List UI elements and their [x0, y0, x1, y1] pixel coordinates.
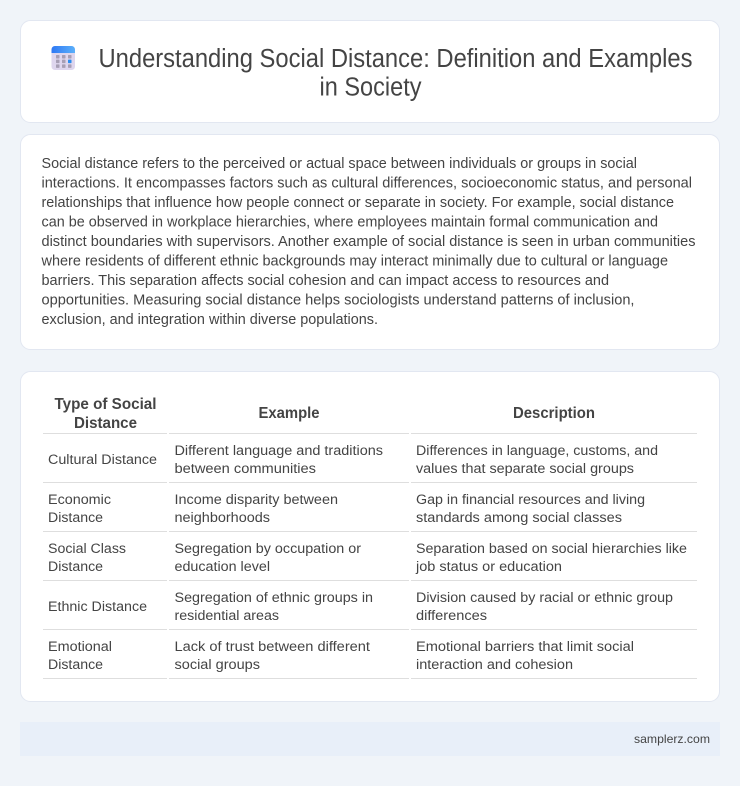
table header: Type of Social	[54, 396, 156, 413]
text block: definition: interactions. It encompasses factors such as cultural differences, socioeconomic status, and personal	[42, 176, 692, 192]
table row: social class distance: Social Class	[48, 541, 126, 557]
table row: economic distance: neighborhoods	[174, 510, 270, 526]
table row: emotional distance	[43, 639, 697, 679]
table row: economic distance: Distance	[48, 510, 103, 526]
table row: economic distance: Income disparity between	[174, 492, 338, 508]
table row: social class distance: Separation based on social hierarchies like	[416, 541, 687, 557]
table row: cultural distance: between communities	[174, 461, 316, 477]
table row: economic distance: standards among social classes	[416, 510, 622, 526]
table row: economic distance	[43, 492, 697, 532]
panel: intro paragraph	[20, 134, 720, 350]
table row: ethnic distance	[43, 590, 697, 630]
table row: economic distance: Economic	[48, 492, 111, 508]
footer: samplerz.com	[634, 732, 710, 746]
table row: ethnic distance: Ethnic Distance	[48, 599, 147, 615]
table row: social class distance: education level	[174, 559, 270, 575]
table row: cultural distance: Differences in language, customs, and	[416, 443, 658, 459]
table row: social class distance: Segregation by occupation or	[174, 541, 361, 557]
table row: emotional distance: Emotional barriers that limit social	[416, 639, 634, 655]
table row: social class distance: job status or education	[415, 559, 562, 575]
table row: cultural distance: values that separate social groups	[416, 461, 634, 477]
panel: header	[20, 20, 720, 122]
text block: definition: opportunities. Measuring social distance helps sociologists understand patterns of inclusion,	[42, 292, 634, 308]
text block: definition: barriers. This separation affects social cohesion and can impact access to resources and	[42, 273, 609, 289]
table row: economic distance: Gap in financial resources and living	[416, 492, 645, 508]
table row: emotional distance: Lack of trust between different	[174, 639, 370, 655]
panel: table	[20, 372, 720, 702]
table row: ethnic distance: Segregation of ethnic groups in	[174, 590, 373, 606]
footer	[20, 722, 720, 756]
table row: cultural distance	[43, 443, 697, 483]
table row: emotional distance: interaction and cohesion	[416, 657, 573, 673]
title: Understanding Social Distance: Definition and Examples	[98, 45, 692, 73]
table row: cultural distance: Cultural Distance	[48, 452, 157, 468]
text block: definition: exclusion, and integration within diverse populations.	[42, 312, 378, 328]
table header: Distance	[74, 415, 137, 432]
icon: calendar	[52, 46, 75, 70]
text block: definition: relationships that influence how people connect or separate in society. For example, social distance	[42, 195, 674, 211]
text block: definition: distinct boundaries with supervisors. Another example of social distance is seen in urban communities	[42, 234, 696, 250]
table row: emotional distance: Emotional	[48, 639, 112, 655]
table row: ethnic distance: residential areas	[174, 608, 279, 624]
title	[98, 45, 692, 102]
table header: Example	[258, 405, 320, 422]
text block: definition: can be observed in workplace hierarchies, where employees maintain formal communication and	[42, 214, 658, 230]
table row: ethnic distance: Division caused by racial or ethnic group	[416, 590, 673, 606]
table row: ethnic distance: differences	[416, 608, 487, 624]
table header	[43, 396, 697, 434]
table row: cultural distance: Different language and traditions	[174, 443, 383, 459]
title: in Society	[320, 74, 422, 102]
table row: emotional distance: Distance	[48, 657, 103, 673]
text block: definition: Social distance refers to the perceived or actual space between individuals or groups in social	[42, 156, 637, 172]
text block: definition	[40, 156, 695, 328]
text block: definition: where residents of different ethnic backgrounds may interact minimally due to cultural or language	[40, 254, 668, 270]
table row: social class distance	[43, 541, 697, 581]
table row: social class distance: Distance	[48, 559, 103, 575]
table header: Description	[513, 405, 595, 422]
table row: emotional distance: social groups	[174, 657, 260, 673]
